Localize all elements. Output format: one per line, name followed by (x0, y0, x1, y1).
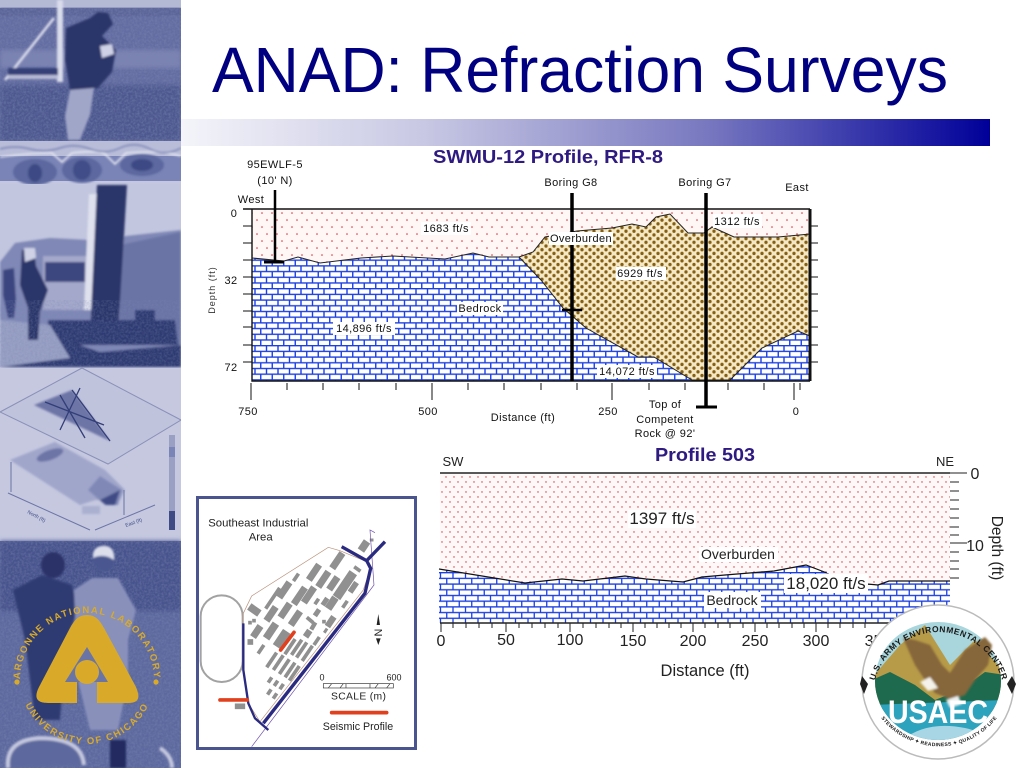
chart labels: East (785, 182, 809, 194)
scale bar: 600 (386, 672, 401, 682)
chart labels: 50 (497, 632, 515, 649)
chart labels: Distance (ft) (661, 662, 749, 680)
north arrow (371, 614, 383, 645)
geologic layers (252, 209, 810, 381)
chart labels: 0 (231, 208, 237, 220)
chart labels: 250 (598, 406, 618, 418)
chart labels: Competent (636, 414, 694, 426)
chart title: Profile 503 (655, 444, 755, 465)
map title: Southeast Industrial (208, 518, 308, 530)
chart labels (437, 454, 984, 680)
logo: Argonne National Laboratory: ARGONNE NATIONAL LABORATORY (14, 606, 160, 679)
label backgrounds (628, 510, 868, 608)
panel: site location map: Area (249, 531, 273, 543)
logo: USAEC seal: STEWARDSHIP ✦ READINESS ✦ QUALITY OF LIFE (882, 716, 997, 746)
chart labels: Bedrock (458, 303, 502, 315)
title: ANAD: Refraction Surveys (212, 34, 948, 106)
chart labels: (10' N) (257, 175, 293, 187)
map axis labels: East (ft) (125, 517, 143, 529)
chart labels: Rock @ 92' (635, 428, 695, 440)
depth axis label: Depth (ft) (988, 516, 1005, 580)
chart labels: 200 (680, 633, 706, 650)
chart labels: 150 (620, 633, 646, 650)
chart labels: SW (443, 454, 464, 469)
chart labels: Boring G7 (678, 177, 732, 189)
geologic layers (439, 473, 950, 623)
chart labels: 0 (437, 633, 446, 650)
chart labels: 250 (742, 633, 768, 650)
chart labels: 72 (224, 362, 238, 374)
chart labels: 14,896 ft/s (336, 323, 392, 335)
chart labels: Distance (ft) (491, 412, 555, 424)
chart labels: West (238, 194, 264, 206)
label backgrounds (333, 214, 762, 378)
logo: USAEC seal (860, 604, 1016, 760)
figure: 3D site map layers (0, 368, 181, 541)
chart labels: 1397 ft/s (629, 509, 695, 528)
photo: two field workers (0, 538, 181, 768)
axes and ticks (243, 209, 818, 400)
depth axis label: Depth (ft) (207, 266, 217, 314)
legend label: Seismic Profile (323, 721, 393, 733)
chart labels: 0 (793, 406, 799, 418)
eagle (903, 637, 992, 708)
logo: Argonne National Laboratory (14, 606, 160, 744)
chart labels: 32 (224, 275, 238, 287)
chart title: SWMU-12 Profile, RFR-8 (433, 146, 663, 167)
chart labels: 95EWLF-5 (247, 159, 303, 171)
site perimeter (243, 547, 370, 722)
chart labels: 6929 ft/s (617, 268, 663, 280)
chart labels: Overburden (550, 233, 612, 245)
photo: drilling rig and truck (0, 184, 181, 367)
chart labels (224, 159, 809, 440)
north arrow: N (371, 629, 383, 637)
chart labels: 500 (418, 406, 438, 418)
panel: SWMU-12 profile chart (200, 146, 820, 442)
scale bar: SCALE (m) (331, 692, 386, 703)
chart labels: 10 (966, 538, 984, 555)
race track (201, 595, 243, 682)
chart labels: Overburden (701, 546, 775, 562)
chart labels: 0 (971, 466, 980, 483)
seal lettering: USAEC (888, 694, 988, 730)
logo: USAEC seal: U.S. ARMY ENVIRONMENTAL CENTER (869, 626, 1007, 680)
panel: Profile 503 chart (437, 444, 1005, 680)
chart labels: NE (936, 454, 954, 469)
map axis labels (27, 510, 142, 527)
scale bar (319, 672, 401, 703)
left photo sidebar (0, 0, 181, 768)
chart labels: 100 (557, 632, 583, 649)
logo: Argonne National Laboratory: UNIVERSITY OF CHICAGO (26, 702, 147, 744)
photo: surveyor in field (0, 0, 181, 141)
chart labels: Boring G8 (544, 177, 598, 189)
buildings (236, 539, 373, 708)
chart labels: 350 (865, 633, 891, 650)
chart labels: 14,072 ft/s (599, 366, 655, 378)
boundary roads (243, 530, 385, 747)
chart labels: Top of (649, 399, 682, 411)
boring markers (264, 190, 717, 407)
chart labels: 300 (803, 633, 829, 650)
chart labels: 1312 ft/s (714, 216, 760, 228)
map axis labels: North (ft) (26, 509, 47, 524)
chart labels: 18,020 ft/s (786, 574, 866, 593)
scale bar: 0 (319, 672, 324, 682)
title gradient bar (181, 119, 990, 146)
chart labels: 1683 ft/s (423, 223, 469, 235)
axes and ticks (441, 473, 967, 632)
chart labels: 750 (238, 406, 258, 418)
chart labels: Bedrock (706, 592, 759, 608)
seismic lines (220, 632, 387, 713)
band: seismic cross-section strip (0, 141, 181, 185)
panel: site location map (198, 498, 416, 748)
